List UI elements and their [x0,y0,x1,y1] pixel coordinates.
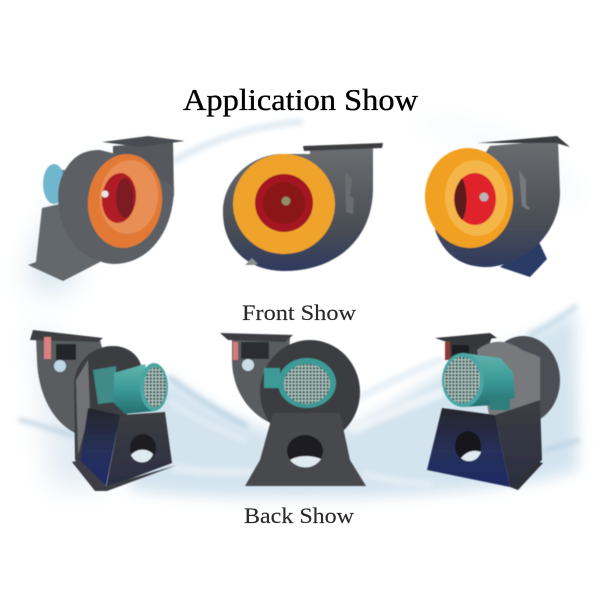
duct flange [477,136,570,147]
motor junction box [93,366,116,404]
hub [102,190,108,198]
red impeller [255,174,313,232]
mounting foot [245,258,258,265]
data plate [56,344,76,360]
housing emboss [345,172,354,214]
duct body [447,337,492,370]
data plate [241,342,269,359]
fan: front view 3 [420,136,570,277]
base stand [28,204,100,281]
red label [445,342,450,360]
duct flange [30,330,103,342]
orange inlet ring [83,150,167,252]
motor end grille [442,353,484,407]
fan: front view 2 [223,143,383,271]
scroll housing [58,150,174,264]
title: Application Show [183,82,419,117]
motor body [113,364,155,414]
duct flange [220,333,293,342]
base stand left face [80,408,120,486]
fan: back view 1 [30,330,177,491]
fan: back view 2 [220,333,366,486]
scroll drum [486,336,560,424]
scroll housing [223,148,373,271]
base foot [510,461,543,490]
motor [264,358,336,408]
orange inlet ring [233,154,335,254]
inner ring [96,157,162,237]
motor end grille [140,363,168,411]
housing emboss [519,170,530,210]
scroll housing [435,140,560,267]
red label [233,342,238,360]
scroll housing [36,336,120,433]
inner ring [441,157,511,239]
duct flange [303,143,383,151]
hub [480,192,488,202]
round sticker [54,360,66,372]
round back plate [260,340,360,444]
base stand [245,413,366,486]
stand hole [287,435,323,467]
motor feet [490,396,510,410]
duct flange [102,136,185,147]
front show label: Front Show [242,300,356,325]
background swooshes [20,118,578,498]
round sticker [242,359,254,371]
base stand right face [106,412,172,488]
back show label: Back Show [244,503,354,528]
red impeller [99,171,139,225]
motor body [463,353,515,407]
plate silver strip [76,360,90,455]
stand hole [130,434,156,462]
fan: back view 3 [427,333,560,490]
back plate [477,342,540,460]
orange inlet ring [420,144,518,252]
base stand left face [427,408,510,487]
red impeller [454,173,496,225]
data plate [452,345,469,357]
round back plate [74,346,142,470]
stand hole [455,431,481,461]
fan: front view 1 [28,136,185,281]
hub [282,196,290,206]
scroll housing [232,336,290,428]
base foot [72,460,177,491]
red label [44,337,51,359]
outlet duct [113,142,174,210]
duct flange [435,333,497,342]
motor [43,164,74,204]
base stand right face [495,400,542,487]
base foot [500,240,547,277]
